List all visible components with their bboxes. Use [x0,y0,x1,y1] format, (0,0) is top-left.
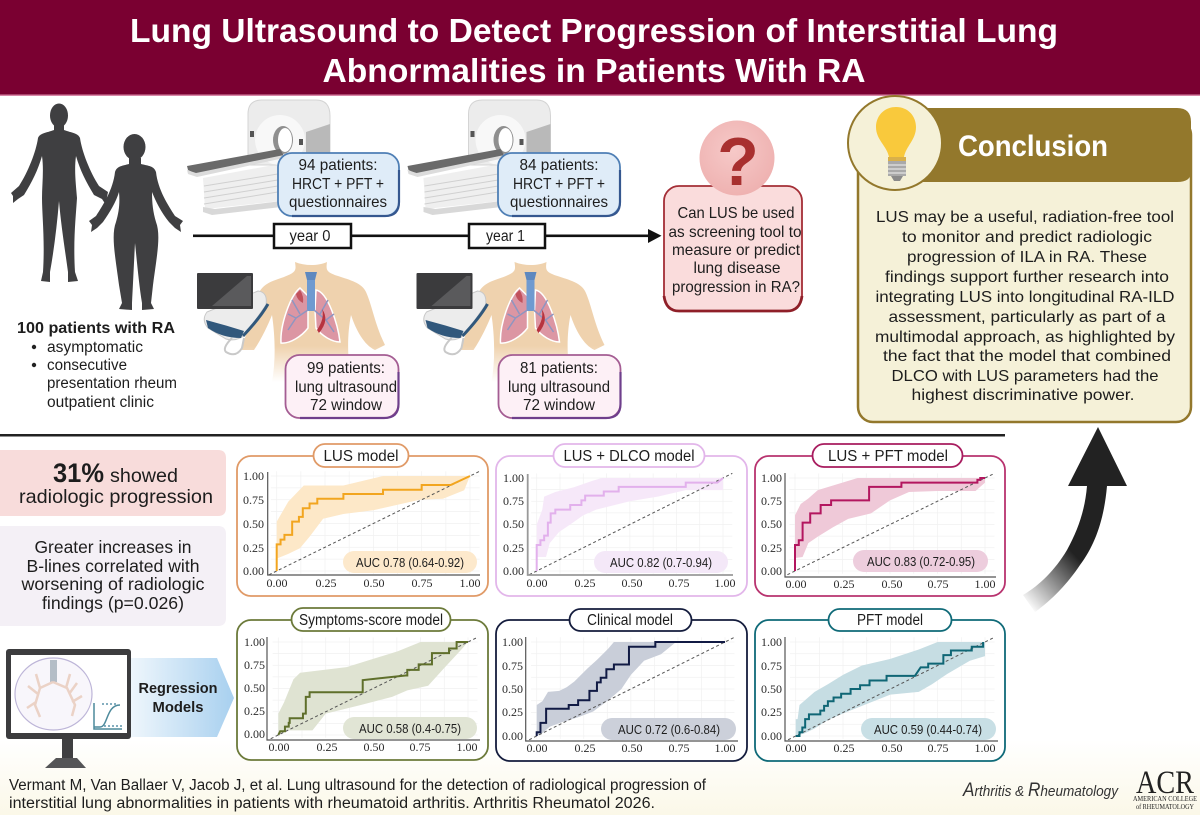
conclusion text: DLCO with LUS parameters had the [892,368,1159,385]
title banner: Lung Ultrasound to Detect Progression of Interstitial Lung [130,12,1058,49]
AUC label: AUC 0.82 (0.7-0.94) [610,556,712,570]
x axis labels: 0.75 [928,741,948,755]
x axis labels: 0.00 [526,741,548,755]
model label [570,609,692,631]
panel: research question: measure or predict [672,242,801,259]
arrow: study timeline [193,224,662,248]
x axis labels: 0.25 [574,576,596,590]
callout: year 1 imaging: questionnaires [510,194,608,211]
callout: year 0 ultrasound: 72 window [310,397,382,414]
callout: year 0 imaging: questionnaires [289,194,387,211]
panel: research question: progression in RA? [672,279,800,296]
y axis labels: 0.00 [761,729,782,743]
x axis labels: 0.50 [364,740,384,754]
x axis labels: 1.00 [974,741,996,755]
icon: question mark [700,120,774,200]
AUC label: AUC 0.83 (0.72-0.95) [867,555,975,569]
model label [314,444,408,467]
stat: B-line correlation: B-lines correlated with [26,556,200,576]
AUC label: AUC 0.78 (0.64-0.92) [356,556,464,570]
x axis labels: 0.00 [526,576,548,590]
x axis labels: 0.25 [316,740,338,754]
stat: B-line correlation: Greater increases in [34,537,192,557]
y axis labels: 0.00 [243,564,264,578]
model label [292,608,450,631]
y axis labels: 1.00 [502,635,523,649]
callout: year 1 imaging: 84 patients: [520,157,598,174]
plot: LUS + DLCO ROC curve [529,473,732,575]
AUC label [343,551,477,573]
arrow: regression models: Models [152,699,204,716]
y axis labels: 0.50 [761,682,782,696]
y axis labels: 0.75 [243,493,264,507]
year 1 marker: year 1 [486,228,525,245]
panel: research question: Can LUS be used [678,205,794,222]
y axis labels: 1.00 [761,635,782,649]
callout: year 0 ultrasound: 99 patients: [307,360,385,377]
icon: CT scanner year 0 [187,100,330,215]
conclusion text: to monitor and predict radiologic [902,229,1152,246]
x axis labels: 0.00 [786,741,806,755]
conclusion text: highest discriminative power. [912,387,1134,404]
conclusion text: the fact that the model that combined [883,348,1171,365]
conclusion text: findings support further research into [885,269,1169,286]
x axis labels [786,577,996,591]
AUC label [601,718,736,740]
x axis labels: 0.25 [834,741,854,755]
x axis labels: 0.50 [882,577,902,591]
y axis labels [761,471,782,578]
x axis labels: 0.50 [364,576,384,590]
x axis labels: 0.75 [668,576,690,590]
y axis labels [502,635,523,743]
y axis labels: 0.75 [244,658,265,672]
arrow: regression models: Regression [138,680,218,697]
x axis labels: 1.00 [714,576,736,590]
year 0 marker [274,224,351,248]
chart: LUS model [237,444,488,596]
plot: Symptoms-score ROC curve [271,637,477,739]
AUC label [594,551,728,573]
patient cohort text: asymptomatic [47,339,143,356]
model label: LUS + DLCO model [564,448,694,465]
icon: torso with lungs and ultrasound year 1 [416,262,604,382]
model label [554,444,704,467]
chart: LUS + PFT model [755,444,1005,596]
stat: B-line correlation: worsening of radiologic [20,574,205,594]
plot: LUS ROC curve [269,471,480,575]
conclusion text: integrating LUS into longitudinal RA-ILD [876,289,1174,306]
y axis labels: 0.75 [503,494,524,508]
x axis labels: 0.00 [266,576,288,590]
AUC label [853,550,988,572]
y axis labels: 0.75 [761,494,782,508]
x axis labels: 0.25 [316,576,336,590]
callout: year 0 imaging [278,153,399,216]
patient cohort text: 100 patients with RA [17,320,175,337]
callout: year 0 imaging: HRCT + PFT + [292,176,384,193]
conclusion text [875,209,1175,404]
y axis labels: 0.25 [243,541,264,555]
x axis labels: 0.75 [928,577,948,591]
y axis labels: 0.50 [243,517,264,531]
callout: year 0 ultrasound [286,355,398,418]
stat: 31 percent progression: radiologic progression [19,486,213,508]
x axis labels: 0.50 [622,741,642,755]
x axis labels: 0.00 [268,740,290,754]
year 0 marker: year 0 [290,228,331,245]
x axis labels: 0.25 [834,577,854,591]
y axis labels: 0.25 [502,705,523,719]
panel: research question: as screening tool to [668,224,802,241]
y axis labels: 0.50 [502,682,523,696]
x axis labels [266,576,480,590]
y axis labels: 0.00 [502,729,523,743]
y axis labels: 1.00 [761,471,782,485]
x axis labels: 1.00 [714,741,736,755]
stat: 31 percent progression [0,450,226,516]
panel: research question: lung disease [694,260,781,277]
model label: Clinical model [587,612,673,629]
arrow: large upward curved arrow [1023,427,1127,612]
y axis labels: 0.50 [503,517,524,531]
patient cohort text: presentation rheum [47,375,177,392]
y axis labels [503,471,524,578]
icon: light bulb [848,96,942,190]
y axis labels: 1.00 [503,471,524,485]
callout: year 1 ultrasound [498,355,620,418]
model label: Symptoms-score model [299,612,443,629]
icon: torso with lungs and ultrasound year 0 [197,262,385,382]
citation [9,777,707,812]
y axis labels: 0.50 [244,681,265,695]
icon: patient silhouettes [11,104,183,310]
callout: year 1 ultrasound: 72 window [523,397,595,414]
AUC label: AUC 0.58 (0.4-0.75) [359,722,461,736]
model label: LUS model [324,448,398,465]
y axis labels [244,635,265,741]
y axis labels [761,635,782,743]
patient cohort text [17,320,177,411]
stat: B-line correlation: findings (p=0.026) [42,593,184,613]
x axis labels [526,576,736,590]
icon: CT scanner year 1 [408,100,550,215]
patient cohort text: outpatient clinic [47,394,154,411]
y axis labels: 0.25 [761,541,782,555]
chart: LUS + DLCO model [496,444,747,596]
callout: year 1 ultrasound: lung ultrasound [508,379,610,396]
background [0,740,1200,815]
y axis labels: 0.00 [503,564,524,578]
x axis labels: 0.75 [410,740,430,754]
x axis labels: 0.75 [668,741,690,755]
chart: Symptoms-score model [237,608,488,760]
x axis labels: 0.50 [882,741,902,755]
stat: 31 percent progression: 31% [53,458,104,488]
title banner [0,0,1200,96]
y axis labels: 1.00 [244,635,265,649]
x axis labels: 0.25 [574,741,596,755]
y axis labels: 0.25 [761,705,782,719]
y axis labels [243,469,264,578]
y axis labels: 0.00 [244,727,265,741]
citation: interstitial lung abnormalities in patients with rheumatoid arthritis. Arthritis Rheumatol 2026. [9,795,655,812]
x axis labels: 0.00 [786,577,806,591]
stat: B-line correlation [0,526,226,626]
x axis labels: 0.75 [412,576,432,590]
y axis labels: 0.75 [761,659,782,673]
x axis labels [268,740,478,754]
stat: 31 percent progression: showed [110,465,178,487]
model label: LUS + PFT model [828,448,948,465]
chart: PFT model [755,609,1005,761]
y axis labels: 1.00 [243,469,264,483]
panel: conclusion [848,96,1191,422]
y axis labels: 0.25 [503,541,524,555]
logo: Arthritis & Rheumatology: Arthritis & Rheumatology [962,780,1119,801]
year 1 marker [469,224,545,248]
AUC label [343,717,477,739]
callout: year 1 ultrasound: 81 patients: [520,360,598,377]
plot: Clinical ROC curve [529,637,734,740]
y axis labels: 0.75 [502,659,523,673]
chart: Clinical model [496,609,747,761]
plot: LUS + PFT ROC curve [787,473,994,575]
y axis labels: 0.25 [244,704,265,718]
panel: conclusion: Conclusion [958,130,1108,163]
x axis labels [526,741,736,755]
model label [812,444,962,467]
x axis labels: 1.00 [460,576,480,590]
citation: Vermant M, Van Ballaer V, Jacob J, et al. Lung ultrasound for the detection of radiological progression of [9,777,707,794]
callout: year 0 imaging: 94 patients: [298,157,378,174]
icon: monitor with lungs and curve [6,649,131,768]
x axis labels [786,741,996,755]
callout: year 1 imaging: HRCT + PFT + [513,176,605,193]
y axis labels: 0.00 [761,564,782,578]
logo: American College of Rheumatology: of RHEUMATOLOGY [1136,803,1194,811]
callout: year 1 imaging [498,153,620,216]
model label: PFT model [857,612,923,629]
arrow: regression models [131,658,234,737]
callout: year 0 ultrasound: lung ultrasound [295,379,397,396]
conclusion text: multimodal approach, as highlighted by [875,329,1175,346]
model label [828,609,952,631]
AUC label: AUC 0.59 (0.44-0.74) [874,723,982,737]
conclusion text: progression of ILA in RA. These [907,249,1147,266]
title banner: Abnormalities in Patients With RA [322,52,866,89]
x axis labels: 1.00 [456,740,478,754]
x axis labels: 0.50 [622,576,642,590]
conclusion text: LUS may be a useful, radiation-free tool [876,209,1174,226]
patient cohort text: consecutive [47,357,127,374]
y axis labels: 0.50 [761,517,782,531]
plot: PFT ROC curve [788,637,994,740]
AUC label: AUC 0.72 (0.6-0.84) [618,723,720,737]
icon: question mark: ? [717,124,759,200]
x axis labels: 1.00 [974,577,996,591]
panel: research question [664,120,802,311]
AUC label [861,718,996,740]
conclusion text: assessment, particularly as part of a [888,309,1166,326]
